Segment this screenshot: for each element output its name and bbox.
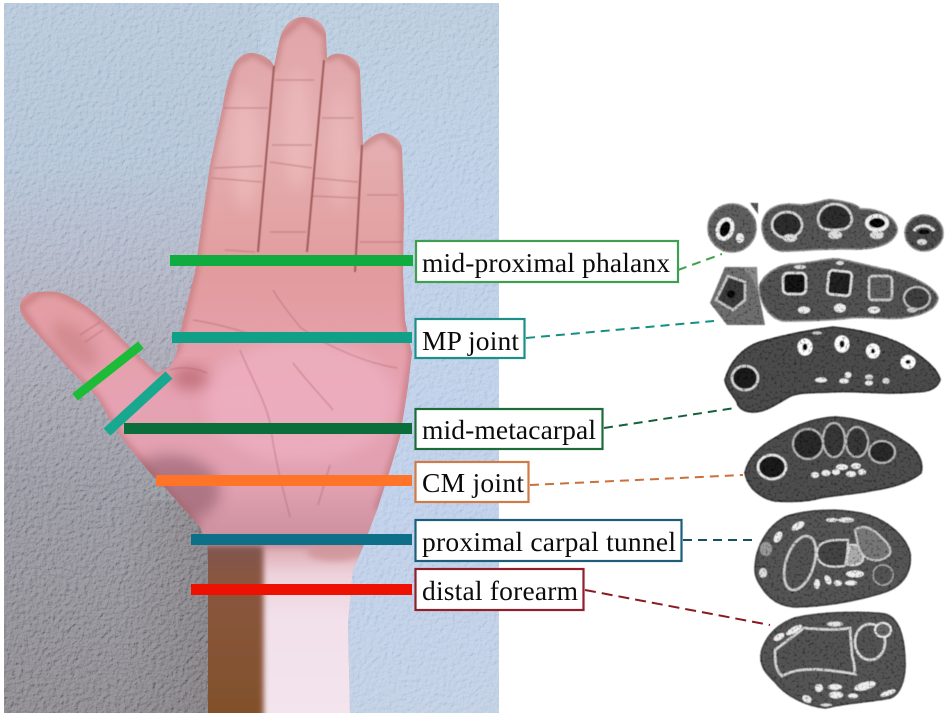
finger separations: [258, 60, 362, 272]
CT section: distal forearm: [761, 612, 905, 708]
level bar: mid-proximal phalanx: [170, 255, 413, 266]
label: mid-metacarpal: mid-metacarpal: [422, 414, 596, 445]
label: proximal carpal tunnel: proximal carpal tunnel: [422, 526, 676, 557]
finger and palm creases: [80, 80, 402, 517]
level bar: mid-metacarpal: [124, 423, 412, 434]
CT section: proximal carpal tunnel: [755, 510, 910, 607]
connector: CM joint: [530, 475, 743, 485]
level bar: proximal carpal tunnel: [191, 534, 412, 545]
hand edge shading: [20, 17, 412, 527]
connector: MP joint: [526, 321, 714, 338]
connector: mid-proximal phalanx: [678, 254, 722, 270]
level bar: distal forearm: [191, 584, 412, 595]
level bar: CM joint: [156, 475, 412, 486]
connector: proximal carpal tunnel: [683, 539, 757, 541]
connector: distal forearm: [585, 590, 770, 625]
CT section: mid-proximal phalanx: [708, 200, 943, 252]
wrist: shadowed side: [208, 545, 268, 713]
label: CM joint: CM joint: [422, 467, 524, 498]
wrist: lit side: [262, 548, 362, 718]
label: mid-proximal phalanx: mid-proximal phalanx: [422, 247, 670, 278]
label: distal forearm: distal forearm: [422, 575, 578, 606]
level bar: MP joint: [172, 332, 412, 343]
CT section: mid-metacarpal: [725, 327, 940, 412]
photo background: wall: [4, 3, 499, 713]
CT section: CM joint: [745, 417, 922, 502]
label: MP joint: MP joint: [422, 325, 519, 356]
thumb bar: mid-proximal phalanx: [75, 345, 141, 397]
photo: hand: [20, 17, 412, 713]
connector: mid-metacarpal: [604, 408, 735, 428]
thumb bar: MP joint: [107, 375, 169, 432]
CT section: MP joint: [710, 259, 938, 325]
label: CM joint: [416, 462, 528, 502]
